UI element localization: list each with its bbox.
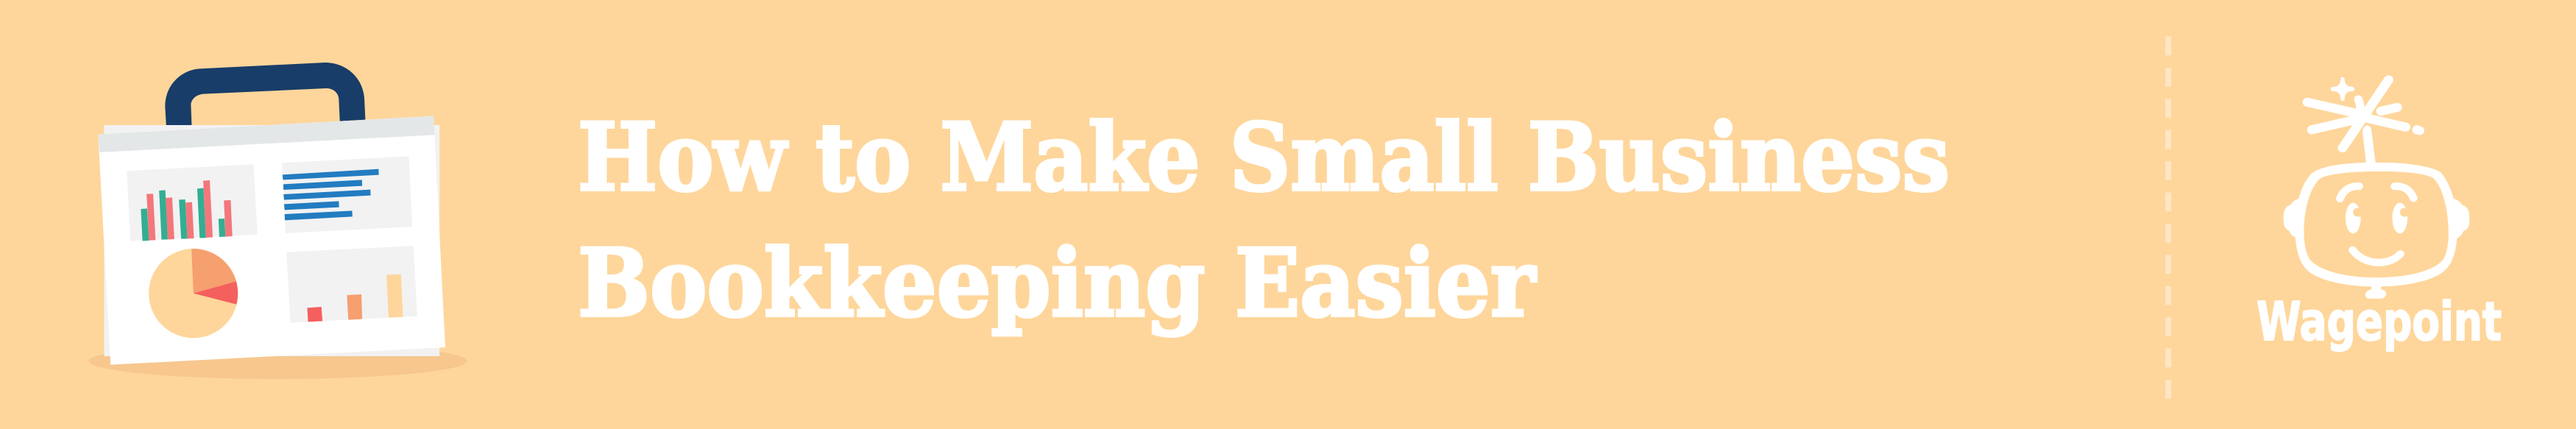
front sheet <box>98 116 445 365</box>
briefcase handle <box>165 63 366 127</box>
column chart <box>286 246 417 323</box>
wordmark: Wagepoint <box>2257 291 2502 352</box>
title line 1: How to Make Small Business <box>578 103 1950 212</box>
sheet header band <box>98 116 434 152</box>
pie chart <box>149 249 238 338</box>
illustration: briefcase dashboard <box>88 63 467 379</box>
dashed divider <box>2165 37 2171 399</box>
robot mascot icon <box>2283 77 2469 299</box>
title <box>578 103 1950 338</box>
grouped bar chart <box>127 164 258 241</box>
title line 2: Bookkeeping Easier <box>578 229 1536 338</box>
back sheet <box>104 125 439 356</box>
Wagepoint logo <box>2257 77 2502 352</box>
shadow <box>88 343 467 379</box>
horizontal bar chart <box>282 156 412 233</box>
